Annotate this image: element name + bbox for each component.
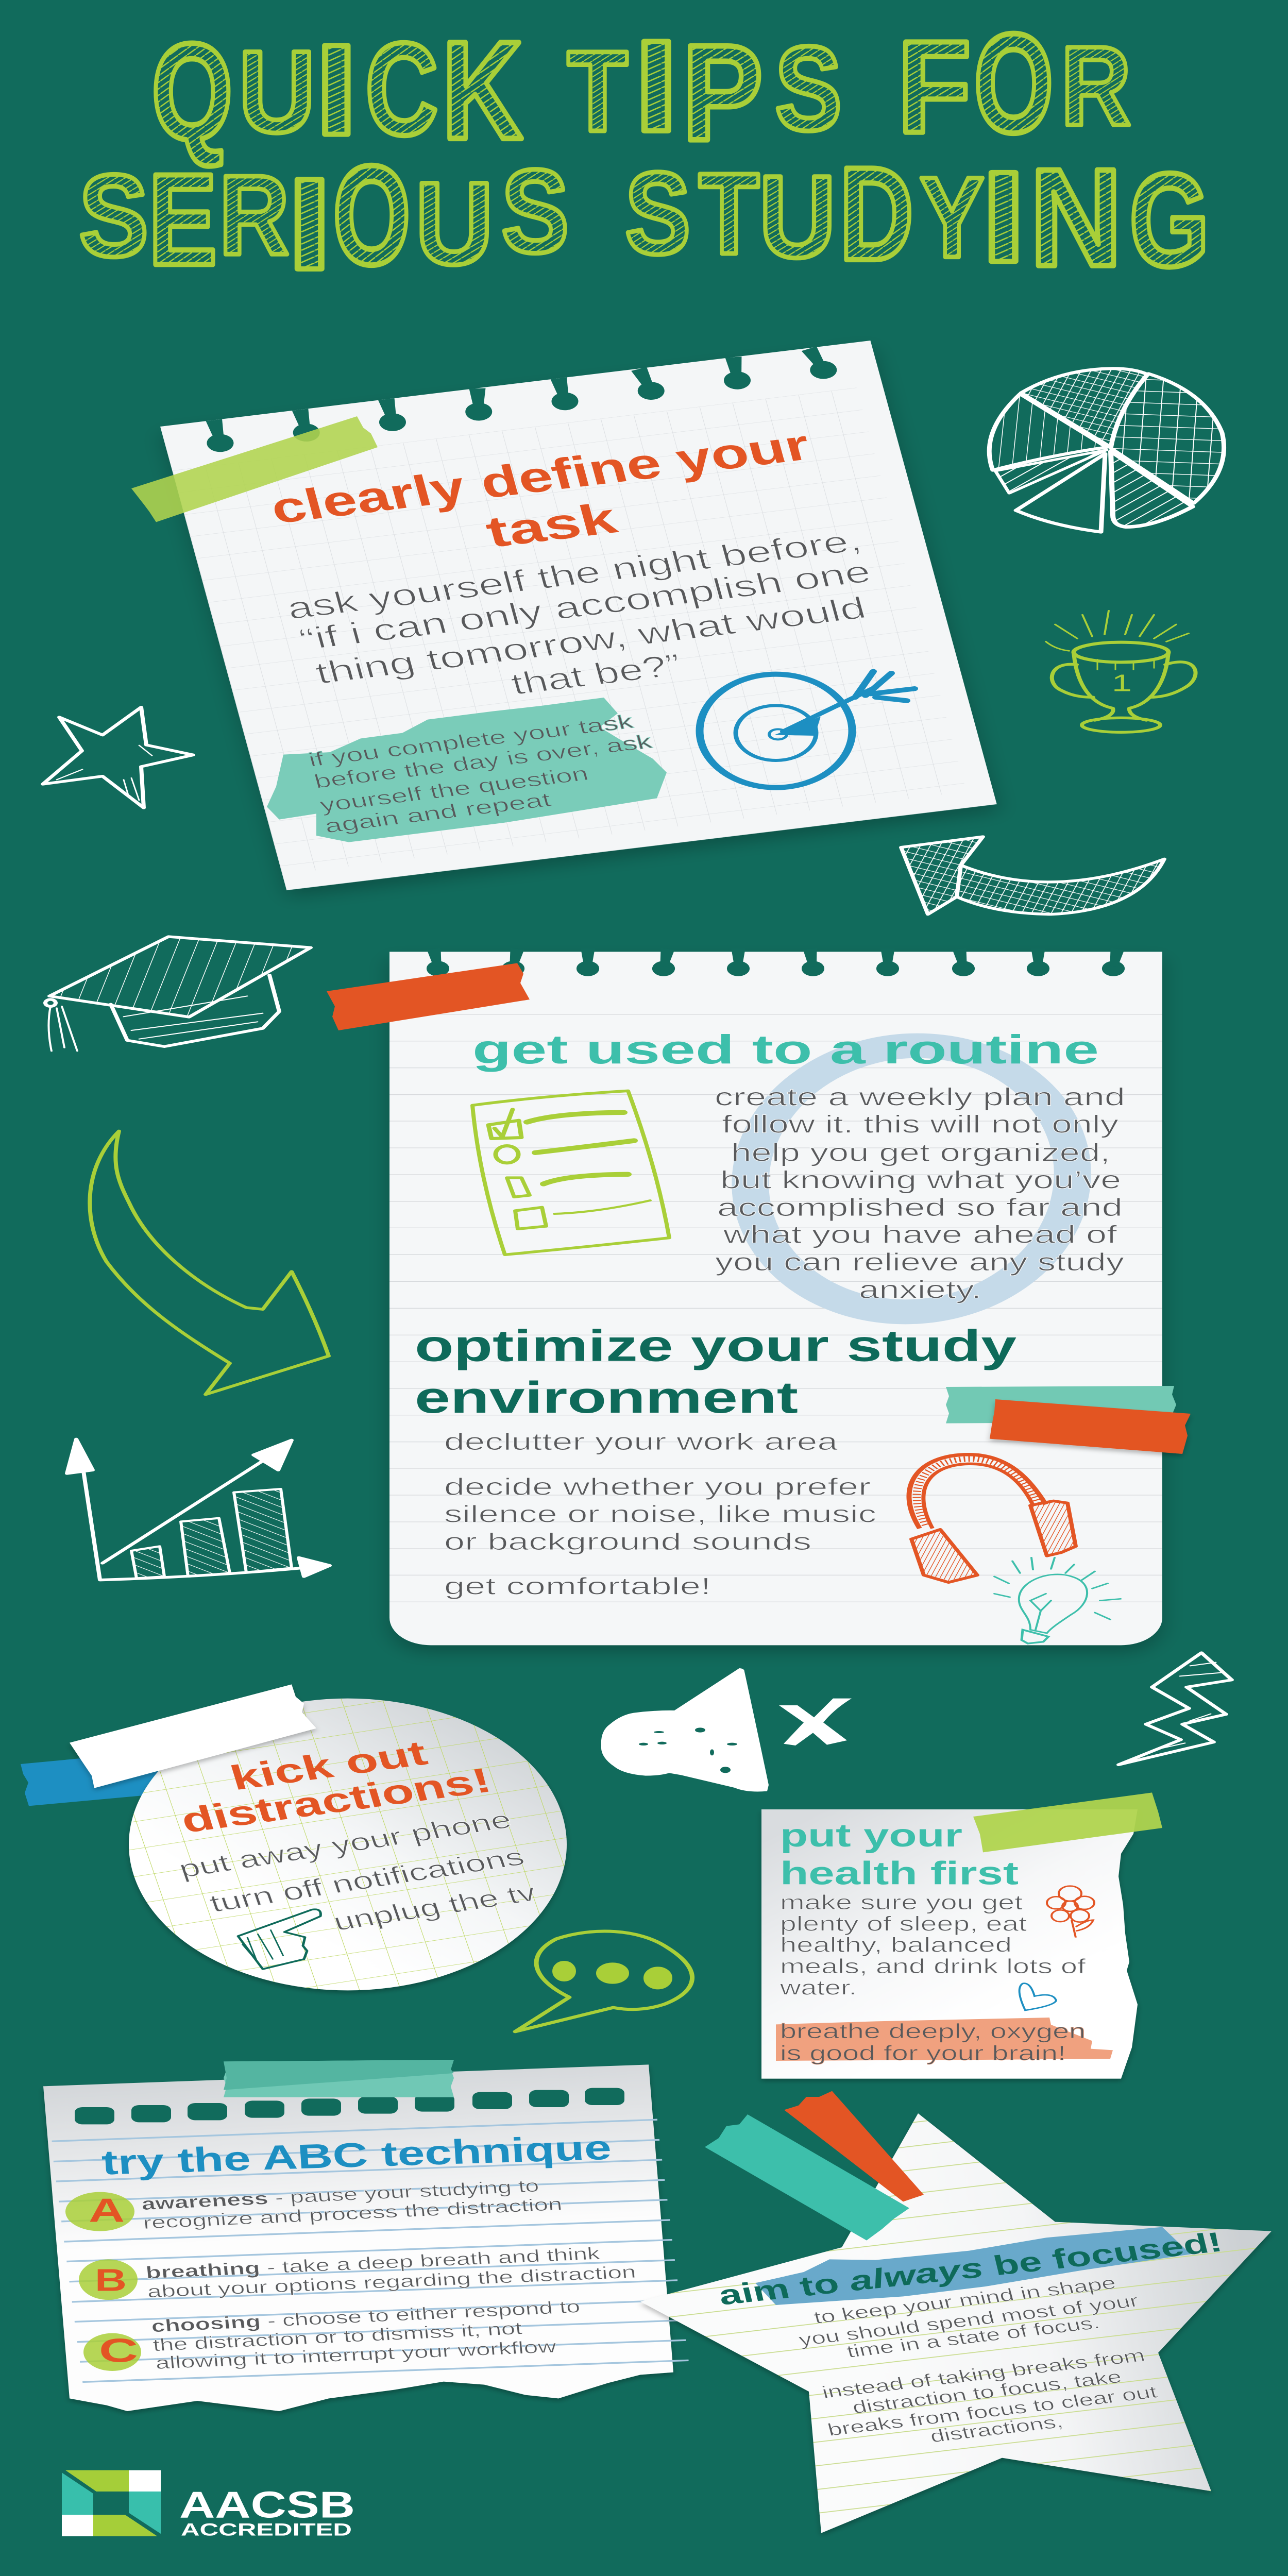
logo: AACSB accredited [62, 2470, 355, 2539]
heading [780, 1818, 1019, 1891]
title: K [442, 12, 523, 168]
icon: flower [1047, 1886, 1094, 1938]
title: S [775, 22, 842, 156]
icon: curved arrow [901, 837, 1164, 914]
icon: pie chart [989, 368, 1224, 532]
title: U [759, 151, 836, 282]
tape: orange [327, 963, 530, 1030]
panel: try the ABC technique [43, 2060, 689, 2411]
title: E [148, 147, 217, 293]
title: F [897, 14, 971, 160]
icon: light bulb [994, 1557, 1121, 1643]
body text [715, 1083, 1125, 1303]
panel: kick out distractions [21, 1684, 567, 1990]
icon: graduation cap [45, 937, 311, 1051]
icon: pointing hand [238, 1909, 320, 1969]
tape: teal [946, 1386, 1176, 1423]
title: Q [151, 15, 233, 168]
tip text: if you complete your task [306, 711, 635, 771]
icon: megaphone [601, 1668, 769, 1792]
binder holes [75, 2088, 624, 2124]
icon: heart [1020, 1984, 1056, 2010]
panel: put your health first [761, 1792, 1162, 2079]
tip text: is good for your brain! [780, 2042, 1066, 2064]
body text: declutter your work area [444, 1428, 838, 1455]
body text: silence or noise, like music [444, 1500, 876, 1528]
badge: B: B [95, 2262, 127, 2298]
title: D [839, 139, 913, 288]
badge: C [83, 2332, 141, 2371]
tape: lime [131, 416, 378, 522]
tape: teal [224, 2060, 454, 2097]
body text: anxiety. [859, 1276, 981, 1303]
list: turn off notifications [206, 1843, 528, 1917]
icon: target with arrow [700, 671, 914, 788]
heading: distractions! [176, 1761, 496, 1840]
body text: help you get organized, [731, 1139, 1110, 1166]
body text: meals, and drink lots of [780, 1955, 1086, 1978]
body text: create a weekly plan and [715, 1083, 1125, 1111]
body text: that be?” [507, 647, 685, 701]
awareness text [141, 2176, 563, 2233]
title: I [634, 13, 679, 159]
breathing text [145, 2244, 637, 2301]
body text: what you have ahead of [723, 1221, 1117, 1248]
heading: optimize your study environment: environment [415, 1372, 798, 1422]
title: U [239, 27, 315, 157]
body text [444, 1428, 876, 1600]
logo wordmark [179, 2484, 355, 2539]
title: T [567, 27, 628, 156]
icon: sketch star [43, 707, 193, 808]
title: P [682, 16, 763, 169]
body text: healthy, balanced [780, 1934, 1012, 1956]
body text: follow it. this will not only [722, 1111, 1118, 1138]
body text: but knowing what you’ve [720, 1166, 1121, 1194]
choosing text: the distraction or to dismiss it, not [152, 2319, 523, 2355]
icon: growth chart [67, 1439, 330, 1580]
body text: get comfortable! [444, 1572, 711, 1600]
tape: orange [784, 2091, 924, 2201]
title: R [1061, 24, 1131, 149]
choosing text: allowing it to interrupt your workflow [155, 2337, 557, 2373]
body text: breaks from focus to clear out [825, 2382, 1159, 2440]
body text [283, 523, 893, 725]
logo mark [62, 2470, 161, 2536]
body text: time in a state of focus. [844, 2313, 1101, 2362]
title: O [333, 137, 411, 294]
body text [796, 2274, 1159, 2446]
title: Y [920, 153, 984, 281]
badge: A [65, 2192, 134, 2231]
heading: task [481, 494, 622, 556]
body text: make sure you get [780, 1891, 1023, 1914]
body text: thing tomorrow, what would [312, 590, 870, 690]
title: S [79, 150, 148, 281]
body text: to keep your mind in shape [811, 2274, 1118, 2328]
tape: blue [21, 1758, 209, 1806]
awareness text: recognize and process the distraction [142, 2195, 563, 2233]
logo wordmark: ACCREDITED [181, 2520, 352, 2539]
icon: headphones [909, 1454, 1076, 1582]
panel: clearly define your task [131, 339, 997, 890]
title: T [699, 150, 759, 278]
badge: A: A [89, 2192, 125, 2229]
body text: or background sounds [444, 1528, 811, 1555]
heading: optimize your study environment [415, 1321, 1016, 1422]
title: I [287, 151, 332, 297]
body text [779, 1891, 1086, 1999]
tip text: yourself the question [317, 763, 591, 816]
panel: routine and study environment [327, 948, 1191, 1645]
tip text: breathe deeply, oxygen [780, 2020, 1086, 2043]
title: S [625, 148, 690, 279]
title: S [501, 145, 569, 278]
icon: checklist [472, 1091, 669, 1255]
title: G [1129, 145, 1210, 294]
body text: you should spend most of your [796, 2291, 1141, 2350]
icon: x mark [779, 1699, 852, 1745]
tip text: again and repeat [322, 789, 553, 837]
tape: white [70, 1684, 316, 1788]
logo wordmark: AACSB [179, 2484, 355, 2526]
icon: trophy: 1 [1112, 669, 1132, 697]
body text: distractions, [928, 2412, 1065, 2446]
body text: accomplished so far and [717, 1194, 1123, 1221]
heading: clearly define your [265, 420, 815, 533]
heading: try the ABC technique [100, 2128, 613, 2182]
tip text [306, 711, 654, 837]
body text: “if i can only accomplish one [296, 554, 874, 656]
heading: health first [780, 1855, 1019, 1891]
breathing text: breathing - take a deep breath and think [145, 2244, 601, 2282]
heading: kick out [226, 1734, 432, 1798]
heading: aim to always be focused! [716, 2226, 1225, 2311]
body text: you can relieve any study [715, 1248, 1124, 1276]
title: U [415, 158, 494, 289]
panel: aim to always be focused [640, 2091, 1272, 2533]
body text: distraction to focus, take [850, 2367, 1124, 2417]
title: C [365, 16, 438, 163]
badge: C: C [99, 2332, 138, 2369]
body text: ask yourself the night before, [283, 523, 865, 625]
awareness text: awareness - pause your studying to [141, 2176, 540, 2214]
blue scribble circle [734, 1037, 1089, 1321]
icon: speech bubble [515, 1931, 692, 2031]
tape: lime [973, 1792, 1162, 1852]
heading: optimize your study environment: optimize your study [415, 1321, 1016, 1370]
salmon brush highlight [776, 2018, 1113, 2061]
choosing text [150, 2297, 581, 2373]
list [175, 1806, 539, 1936]
heading: get used to a routine: get used to a routine [472, 1027, 1099, 1072]
body text: decide whether you prefer [444, 1473, 871, 1500]
title: I [981, 145, 1026, 289]
breathing text: about your options regarding the distraction [146, 2263, 637, 2301]
badge: B [79, 2259, 138, 2300]
icon: trophy [1046, 611, 1195, 732]
list: put away your phone [175, 1806, 515, 1883]
title: I [315, 18, 358, 162]
title [79, 5, 1210, 297]
star paper [640, 2113, 1272, 2533]
title: N [1030, 140, 1122, 295]
body text: plenty of sleep, eat [780, 1912, 1027, 1935]
tape: teal [705, 2114, 909, 2241]
blue brush highlight [755, 2227, 1191, 2305]
tape: orange [990, 1399, 1191, 1454]
heading [265, 420, 828, 581]
list: unplug the tv [330, 1878, 539, 1936]
body text: water. [779, 1976, 857, 1999]
heading: put your [780, 1818, 962, 1854]
choosing text: choosing - choose to either respond to [150, 2297, 581, 2336]
teal brush highlight [267, 698, 667, 842]
icon: lightning bolt [1118, 1653, 1232, 1765]
tip text: before the day is over, ask [312, 731, 654, 792]
tip text [780, 2020, 1086, 2064]
body text: instead of taking breaks from [820, 2346, 1147, 2402]
title: O [974, 5, 1054, 162]
circle paper [129, 1699, 567, 1990]
title: R [219, 152, 289, 279]
icon: lime curved arrow [90, 1131, 329, 1395]
